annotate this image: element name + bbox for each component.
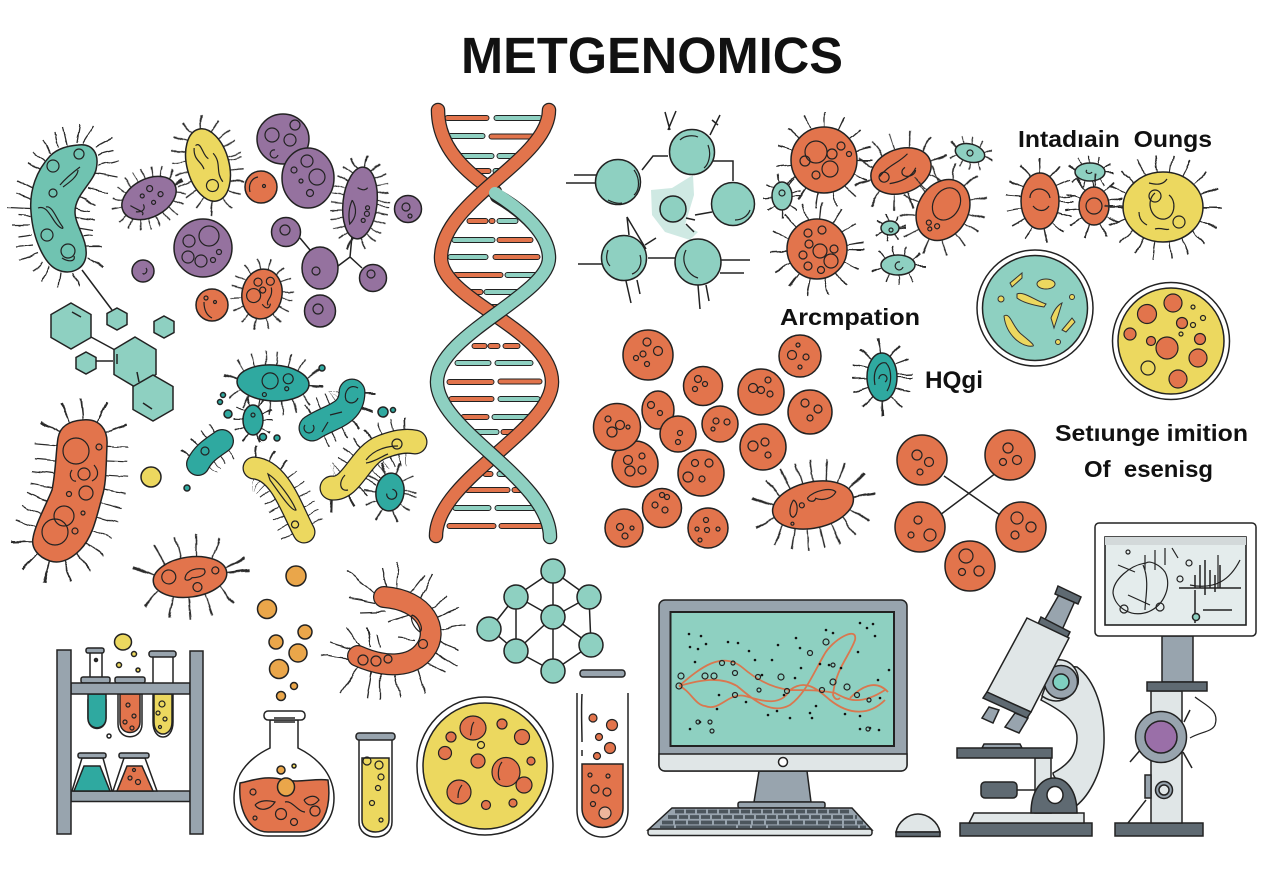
panel: microbes mid left (33, 363, 465, 700)
round flask (234, 711, 334, 836)
panel: orange cell cluster (594, 330, 832, 548)
text label: HQgi: HQgi (925, 367, 983, 394)
bacterium: orange tall (1021, 173, 1059, 229)
rack flasks (72, 753, 157, 791)
mouse (896, 814, 940, 836)
bacterium: yellow round (1123, 172, 1203, 242)
petri dish: teal (977, 250, 1093, 366)
small teal dots (184, 365, 396, 491)
screen bezel (659, 600, 907, 771)
rack frame (57, 650, 203, 834)
DNA double helix (436, 110, 552, 537)
bacterium: big orange (791, 127, 857, 193)
strand: teal (437, 193, 550, 537)
bacterium: large teal bean (8, 124, 119, 287)
purple cells (132, 114, 422, 327)
text label: Arcmpation: Arcmpation (780, 304, 920, 330)
eyepiece (1038, 586, 1081, 638)
strand: orange start (438, 110, 495, 192)
bacterium: teal oval lower (373, 471, 407, 513)
bacterium: orange round (787, 219, 847, 279)
bacterium: teal with hairs (867, 353, 897, 401)
bacterium: yellow rod up (332, 439, 415, 490)
screen chart (670, 612, 894, 746)
base (1115, 823, 1203, 836)
strand: orange (436, 110, 552, 536)
panel: orange microbes top right (772, 126, 1248, 482)
display (1095, 523, 1256, 636)
bacterium: purple rod (339, 165, 381, 241)
bacterium: orange C (321, 562, 465, 700)
column (1151, 691, 1182, 823)
tube: yellow (149, 651, 176, 737)
tube (987, 618, 1069, 712)
bacterium: teal S rod (304, 387, 358, 433)
orange cells and bacterium (196, 171, 286, 322)
microscope (957, 586, 1104, 836)
bacterium: orange bug center (768, 474, 858, 536)
bacterium: small teal oval (243, 405, 263, 435)
keyboard (648, 808, 872, 836)
bacterium: yellow rod (178, 124, 238, 206)
node network (477, 559, 603, 683)
stand (754, 771, 811, 802)
bacterium: orange bug (151, 552, 229, 602)
hump (1031, 778, 1077, 813)
teal cell network (566, 111, 754, 309)
bacterium: large orange rod (33, 420, 107, 562)
panel: linked orange cells (895, 430, 1046, 591)
tall test tube with cap (577, 670, 628, 837)
bacterium: teal bean (198, 441, 222, 464)
large petri dish (417, 697, 553, 835)
amber dots (258, 566, 312, 700)
yellow test tube (356, 733, 395, 837)
panel: microbes top left (8, 114, 422, 327)
title: METGENOMICS (461, 27, 843, 84)
tube: teal (81, 648, 110, 728)
dial: purple (1130, 710, 1192, 768)
base pair rungs (445, 116, 543, 528)
bacterium: teal oval (236, 363, 310, 403)
neck (1162, 636, 1193, 682)
lower knob (1156, 782, 1172, 798)
text label: Intadiain Oungs: Intadıain Oungs (1018, 126, 1212, 152)
bacterium: orange oval b (905, 170, 981, 250)
wire (1190, 697, 1216, 738)
petri dish: yellow (1112, 282, 1230, 400)
focus knob (981, 782, 1035, 798)
computer monitor (659, 600, 907, 808)
small teal bacteria (772, 140, 1105, 275)
bacterium: orange small (1079, 187, 1109, 225)
droplets (107, 634, 140, 738)
test tube rack (57, 634, 203, 834)
objective band (982, 692, 1031, 733)
bacterium: yellow rod down (254, 468, 304, 532)
text label: Of esenisg: Of esenisg (1084, 456, 1213, 482)
cell: yellow dot (141, 467, 161, 487)
tube: red (115, 677, 145, 737)
knob (1042, 660, 1078, 701)
stage (982, 744, 1022, 748)
column and arm (1035, 758, 1051, 813)
analyzer station (1095, 523, 1256, 836)
molecule: hexagons (51, 270, 174, 421)
bacterium: orange oval a (864, 140, 938, 202)
base (960, 823, 1092, 836)
bacterium: purple oval (114, 167, 184, 229)
text label: Setiunge imition: Setıunge imition (1055, 420, 1248, 446)
